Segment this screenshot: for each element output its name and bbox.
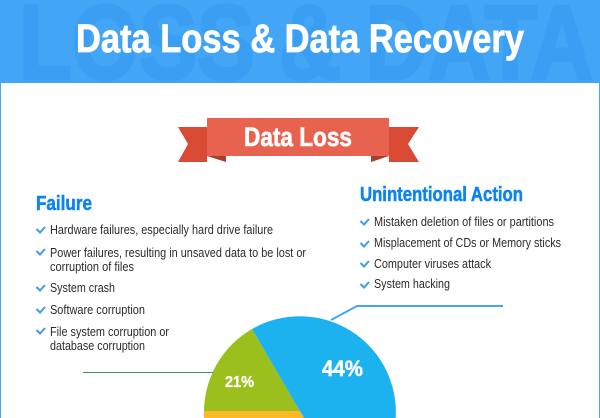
title: Data Loss & Data Recovery (76, 17, 525, 61)
failure list: Power failures, resulting in unsaved data to be lost or (50, 245, 307, 260)
heading: unintentional action: Unintentional Action (360, 184, 523, 206)
blue slice 44% (252, 316, 396, 418)
failure list: Hardware failures, especially hard drive failure (50, 222, 273, 237)
unintentional action list: Computer viruses attack (374, 256, 491, 271)
failure list (50, 222, 307, 353)
panel: unintentional action (360, 184, 561, 291)
yellow slice (204, 411, 304, 418)
white content panel (1, 83, 599, 418)
unintentional action list: Mistaken deletion of files or partitions (374, 214, 554, 229)
pie chart (204, 316, 396, 418)
value: 44%: 44% (322, 356, 363, 381)
failure list: database corruption (50, 338, 145, 353)
failure list: Software corruption (50, 302, 145, 317)
value: 21%: 21% (225, 374, 254, 391)
unintentional action check marks (360, 219, 369, 288)
green slice 21% (204, 329, 300, 411)
leader line: green slice (83, 372, 213, 374)
failure list: File system corruption or (50, 324, 170, 339)
failure check marks (36, 227, 45, 334)
ribbon heading: Data Loss: Data Loss (244, 122, 352, 152)
ribbon heading: Data Loss (178, 118, 419, 162)
panel: failure (36, 193, 307, 353)
unintentional action list (374, 214, 561, 291)
heading: failure: Failure (36, 193, 92, 215)
leader line: blue slice (331, 306, 503, 320)
failure list: System crash (50, 280, 115, 295)
unintentional action list: Misplacement of CDs or Memory sticks (374, 235, 561, 250)
unintentional action list: System hacking (374, 276, 450, 291)
failure list: corruption of files (50, 259, 134, 274)
